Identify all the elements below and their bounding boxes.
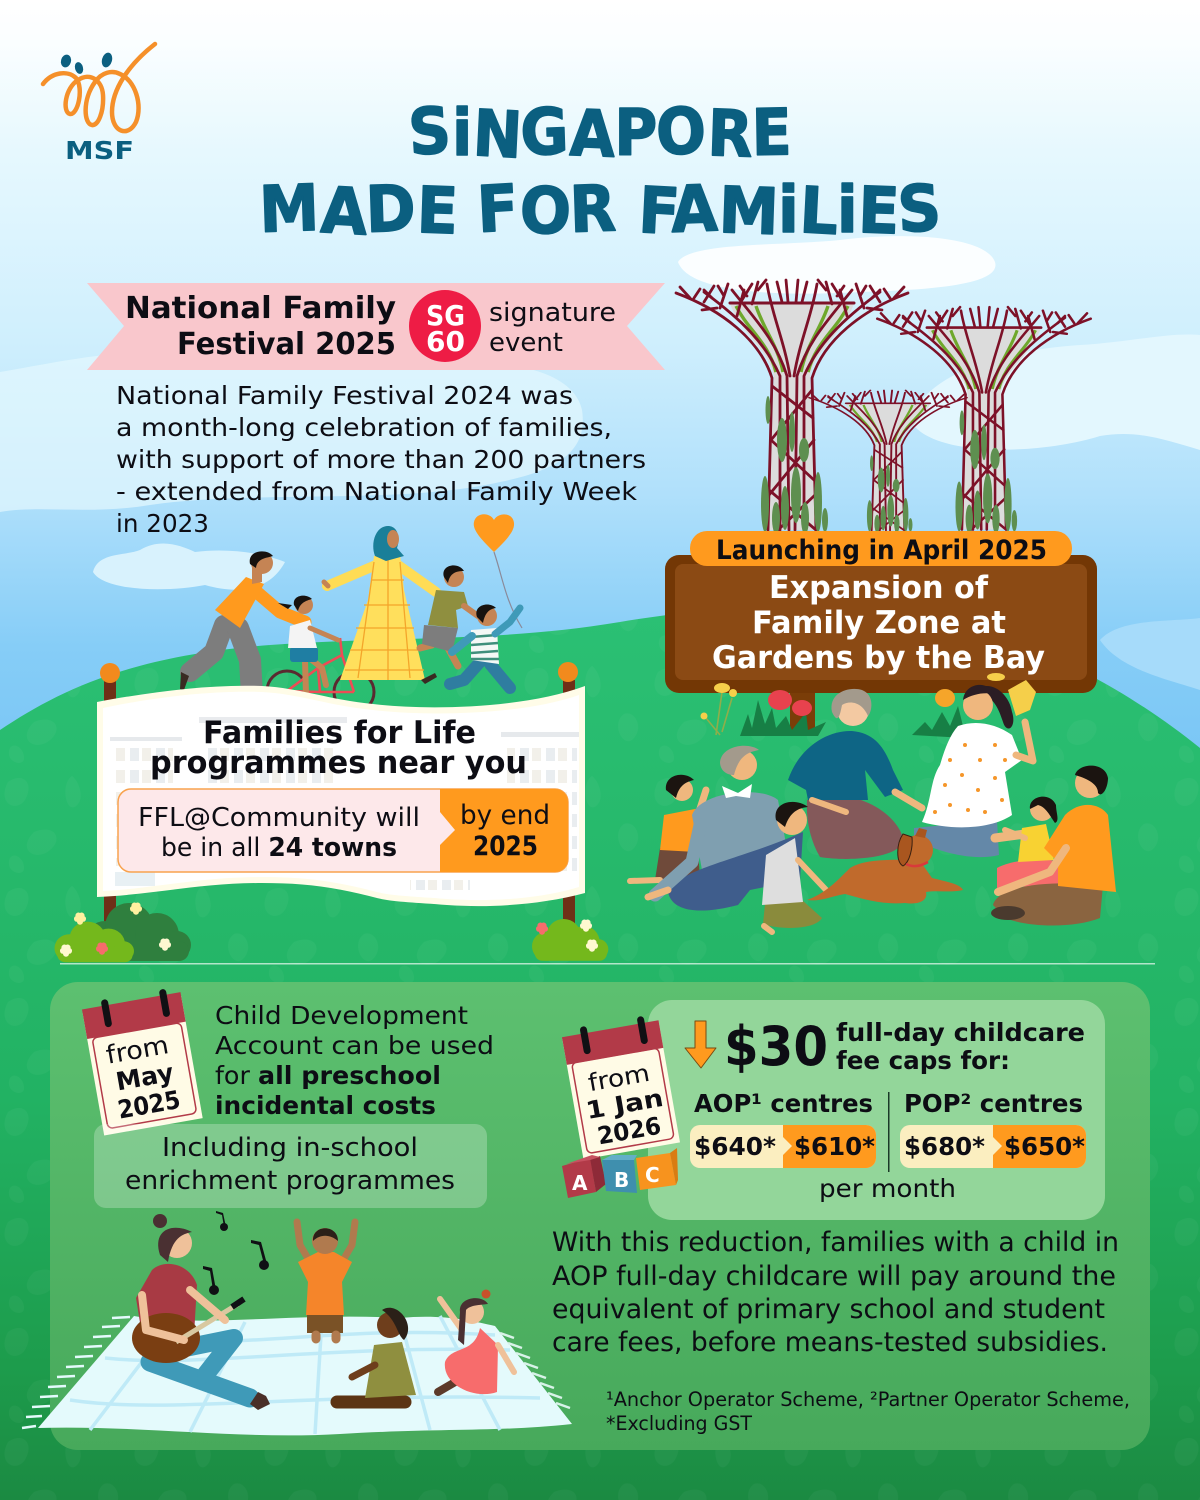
calendar: from May 2025: 2025: [116, 1085, 183, 1125]
callout: FFL@Community: 2025: [473, 831, 538, 862]
text: child development account: Account can be used: [215, 1031, 494, 1060]
picnic blanket: [22, 1316, 572, 1435]
text: festival description: in 2023: [116, 509, 209, 538]
wavy sign: [97, 686, 585, 906]
text: reduction explanation: care fees, before means-tested subsidies.: [552, 1327, 1108, 1358]
sign: expansion of family zone: Gardens by the Bay: [712, 640, 1045, 676]
text: festival description: National Family Festival 2024 was: [116, 381, 573, 410]
posts and sign: Families for Life: [54, 662, 608, 962]
grandpa: [648, 746, 803, 911]
table: AOP and POP fee caps: [690, 1089, 1086, 1203]
footnotes: *Excluding GST: [606, 1412, 752, 1435]
logo: MSF: [43, 44, 155, 165]
POP prices: [900, 1125, 1086, 1168]
father in orange: [991, 766, 1116, 926]
heading: programmes near you: [150, 745, 527, 781]
calendar: from 1 Jan 2026: [561, 1013, 680, 1159]
callout: enrichment programmes: [94, 1124, 487, 1208]
footnotes: [606, 1388, 1130, 1435]
illustration: supertrees: [676, 280, 1091, 534]
text: reduction explanation: equivalent of primary school and student: [552, 1294, 1105, 1325]
callout: enrichment programmes: enrichment programmes: [125, 1166, 455, 1196]
table: AOP and POP fee caps: POP² centres: [904, 1089, 1083, 1118]
banner: National Family Festival 2025: National Family: [125, 291, 396, 326]
icon: ABC blocks: A: [572, 1171, 588, 1195]
boy jumping with arms up: [297, 1222, 355, 1339]
AOP prices: $610*: [794, 1132, 875, 1161]
man in orange: [180, 551, 305, 695]
sign: expansion of family zone: Family Zone at: [752, 605, 1006, 641]
text: $30 fee caps: full-day childcare: [836, 1018, 1085, 1047]
grandma: [788, 689, 922, 859]
illustration: flowers under sign: [700, 673, 1005, 738]
pregnant mother: [914, 680, 1040, 857]
text: festival description: a month-long celebration of families,: [116, 413, 612, 442]
calendar: from May 2025: from: [104, 1030, 171, 1070]
callout: enrichment programmes: Including in-school: [162, 1133, 418, 1163]
AOP prices: [690, 1125, 876, 1168]
calendar: from May 2025: [81, 986, 203, 1136]
sky background: [0, 0, 1200, 760]
callout: FFL@Community: by end: [460, 800, 550, 831]
panel: childcare and preschool support: [50, 982, 1150, 1450]
bushes: [54, 903, 608, 962]
text: reduction explanation: [552, 1227, 1119, 1358]
boy with striped shirt: [450, 605, 520, 688]
panel: fee caps: [648, 1000, 1105, 1220]
callout: FFL@Community: [118, 789, 568, 872]
dog: [807, 828, 963, 903]
banner: National Family Festival 2025: event: [489, 328, 563, 358]
text: festival description: [116, 381, 646, 538]
boy in orange, left: [630, 775, 706, 881]
text: child development account: Child Development: [215, 1001, 468, 1030]
text: reduction explanation: With this reduction, families with a child in: [552, 1227, 1119, 1258]
title: SiNGAPORE: [406, 94, 792, 174]
icon: down arrow: [685, 1021, 716, 1068]
illustration: family walking: [180, 514, 522, 712]
text: festival description: with support of more than 200 partners: [116, 445, 646, 474]
POP prices: $680*: [904, 1132, 985, 1161]
text: $30 fee caps: [724, 1015, 1085, 1078]
seated boy: [337, 1308, 416, 1402]
table: AOP and POP fee caps: AOP¹ centres: [694, 1089, 873, 1118]
girl on bicycle: [267, 596, 374, 712]
illustration: family sitting on grass: [630, 680, 1116, 932]
text: $30 fee caps: $30: [724, 1015, 828, 1078]
title: [258, 94, 943, 250]
mother in yellow dress: [324, 526, 437, 684]
teacher with guitar: [132, 1214, 270, 1410]
icon: SG60 badge: [409, 290, 481, 362]
calendar: from 1 Jan 2026: 2026: [595, 1112, 663, 1150]
icon: ABC blocks: B: [614, 1168, 629, 1192]
logo: MSF: MSF: [65, 136, 134, 165]
seated girl in pink: [438, 1290, 514, 1394]
text: child development account: [215, 1001, 494, 1120]
text: festival description: - extended from National Family Week: [116, 477, 638, 506]
banner: National Family Festival 2025: [87, 283, 665, 370]
callout: FFL@Community: be in all 24 towns: [161, 833, 397, 863]
text: $30 fee caps: fee caps for:: [836, 1046, 1010, 1075]
banner: National Family Festival 2025: signature: [489, 298, 616, 328]
sign: expansion of family zone: [665, 531, 1097, 735]
music notes: [203, 1211, 269, 1295]
balloon: [474, 514, 522, 628]
calendar: from May 2025: May: [114, 1058, 176, 1096]
icon: ABC blocks: [562, 1148, 678, 1198]
callout: FFL@Community: FFL@Community will: [138, 803, 420, 833]
boy in white shirt: [762, 802, 828, 932]
footnotes: ¹Anchor Operator Scheme, ²Partner Operator Scheme,: [606, 1388, 1130, 1411]
girl in yellow: [997, 797, 1058, 888]
calendar: from 1 Jan 2026: from: [586, 1059, 652, 1097]
title: MADE FOR FAMiLiES: [258, 172, 943, 250]
icon: SG60 badge: 60: [426, 325, 465, 358]
text: reduction explanation: AOP full-day childcare will pay around the: [552, 1261, 1116, 1292]
icon: SG60 badge: SG: [426, 299, 465, 332]
text: child development account: incidental costs: [215, 1091, 436, 1120]
heading: Families for Life: [203, 715, 476, 751]
table: AOP and POP fee caps: per month: [819, 1174, 956, 1203]
buildings: [110, 717, 579, 890]
banner: National Family Festival 2025: Festival 2025: [177, 327, 396, 362]
green hills: [0, 607, 1200, 1500]
icon: ABC blocks: C: [645, 1163, 660, 1187]
sign: expansion of family zone: Expansion of: [769, 570, 988, 606]
boy in olive shirt: [420, 565, 478, 666]
illustration: picnic music session: [22, 1211, 572, 1435]
POP prices: $650*: [1004, 1132, 1085, 1161]
clouds: [0, 236, 1200, 690]
heading: [150, 715, 527, 781]
AOP prices: $640*: [694, 1132, 776, 1161]
divider: [60, 963, 1155, 964]
sign: expansion of family zone: Launching in April 2025: [716, 535, 1047, 566]
calendar: from 1 Jan 2026: 1 Jan: [584, 1084, 665, 1125]
text: child development account: for all preschool: [215, 1061, 441, 1090]
sign posts: [100, 662, 578, 928]
